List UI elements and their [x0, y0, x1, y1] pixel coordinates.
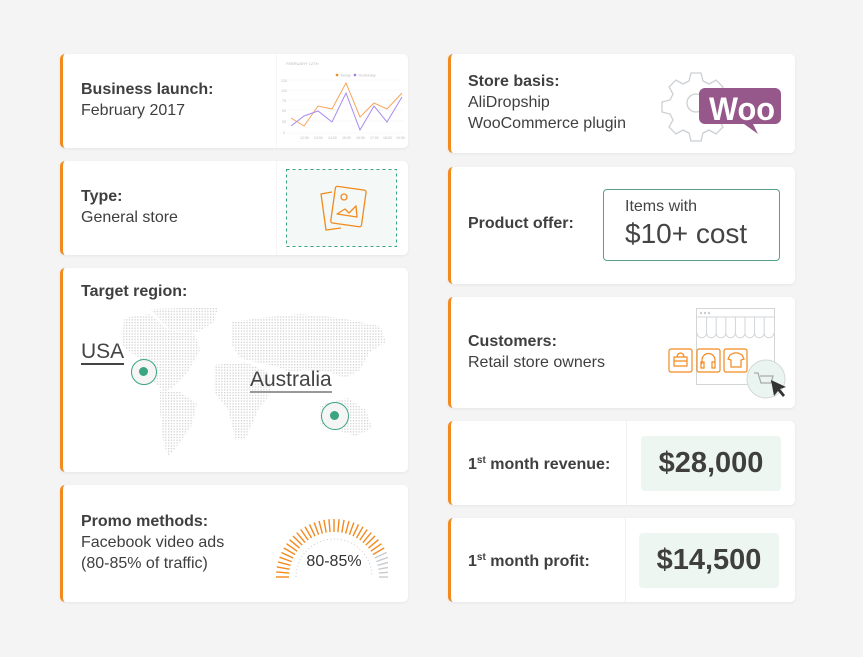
chart: line chart: 13:00: [314, 136, 323, 140]
text: promo methods: [81, 513, 224, 572]
heading: target region: Target region:: [81, 283, 187, 300]
chart: line chart: 19:00: [396, 136, 405, 140]
text: revenue label: 1st month revenue:: [468, 455, 610, 473]
icon: images placeholder: [276, 161, 397, 255]
chart: line chart: 16:00: [356, 136, 365, 140]
text: promo methods: Facebook video ads: [81, 534, 224, 551]
callout: items with $10+ cost: [603, 189, 780, 261]
text: business launch: Business launch:: [81, 81, 213, 98]
chart: line chart: 50: [282, 109, 286, 113]
card: type: [60, 161, 408, 255]
text: type: Type:: [81, 188, 122, 205]
chart: line chart: 12:00: [300, 136, 309, 140]
chart: line chart: 0: [283, 131, 285, 135]
card: store basis: [448, 54, 795, 153]
icon: storefront with cart: [668, 308, 786, 398]
chart: line chart: 125: [281, 79, 287, 83]
card: business launch: [60, 54, 408, 148]
text: product offer: Product offer:: [468, 215, 574, 232]
chart: line chart: Today: [340, 72, 351, 78]
value: $14,500: [639, 533, 779, 588]
value: $14,500: $14,500: [657, 544, 761, 576]
label: USA: USA: [81, 340, 124, 363]
card: promo methods: [60, 485, 408, 602]
chart: gauge: 80-85%: [306, 553, 362, 570]
chart: line chart: 75: [282, 99, 286, 103]
value: $28,000: [641, 436, 781, 491]
text: customers: Retail store owners: [468, 354, 605, 371]
text: store basis: Store basis:: [468, 73, 560, 90]
chart: line chart: 17:00: [370, 136, 379, 140]
text: promo methods: (80-85% of traffic): [81, 555, 208, 572]
icon: gear + woo logo: Woo: [709, 91, 775, 127]
marker: USA: [131, 359, 157, 385]
card: 1st month profit: [448, 518, 795, 602]
chart: line chart: Yesterday: [358, 72, 376, 78]
chart: line chart: [276, 54, 405, 148]
map: world dotted: [123, 308, 385, 457]
text: customers: Customers:: [468, 333, 557, 350]
chart: line chart: FEBRUARY 12TH: [286, 61, 319, 66]
text: business launch: [81, 81, 213, 119]
card: 1st month revenue: [448, 421, 795, 505]
text: type: General store: [81, 209, 178, 226]
text: type: [81, 188, 178, 226]
chart: line chart: 25: [282, 120, 286, 124]
card: target region: [60, 268, 408, 472]
icon: gear + woo logo: [661, 72, 781, 142]
card: customers: [448, 297, 795, 408]
text: promo methods: Promo methods:: [81, 513, 208, 530]
text: store basis: [468, 73, 626, 132]
callout: items with $10+ cost: Items with: [625, 198, 697, 215]
value: $28,000: $28,000: [659, 447, 763, 479]
marker: Australia: [321, 402, 349, 430]
text: store basis: WooCommerce plugin: [468, 115, 626, 132]
label: Australia: Australia: [250, 368, 332, 391]
chart: line chart: 14:00: [328, 136, 337, 140]
text: profit label: 1st month profit:: [468, 552, 590, 570]
text: business launch: February 2017: [81, 102, 185, 119]
text: store basis: AliDropship: [468, 94, 550, 111]
card: product offer: [448, 167, 795, 284]
chart: gauge: [276, 519, 388, 578]
callout: items with $10+ cost: $10+ cost: [625, 218, 747, 249]
text: customers: [468, 333, 605, 371]
chart: line chart: 15:00: [342, 136, 351, 140]
chart: line chart: 18:00: [383, 136, 392, 140]
chart: line chart: 100: [281, 89, 287, 93]
